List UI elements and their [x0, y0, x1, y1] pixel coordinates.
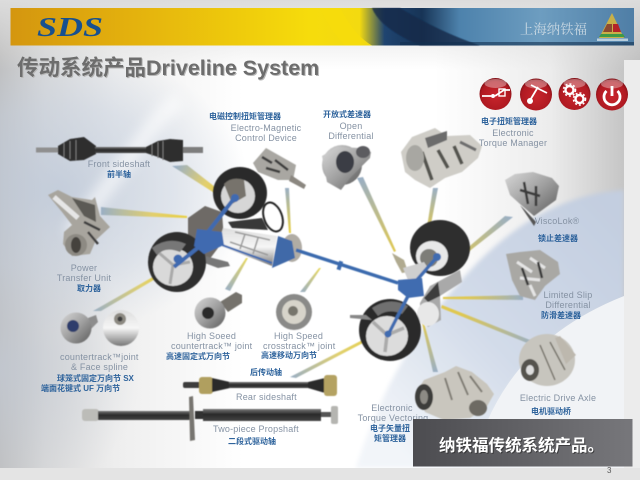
button: gears — [558, 78, 590, 110]
label: electronic torque manager — [479, 116, 547, 148]
front lower wheel — [148, 232, 206, 292]
label: front sideshaft: Front sideshaft — [88, 159, 151, 169]
two-piece propshaft — [82, 396, 338, 441]
front axle arm — [202, 256, 230, 268]
limited slip differential — [506, 250, 560, 300]
open differential — [322, 145, 371, 190]
label: high speed crosstrack: 高速移动万向节 — [261, 350, 317, 360]
title: 传动系统产品Driveline System — [17, 55, 319, 80]
label: torque vectoring: 电子矢量扭 — [370, 423, 410, 433]
label: power transfer unit: Power — [71, 263, 97, 273]
label: open differential: 开放式差速器 — [323, 109, 371, 119]
label: rear sideshaft: Rear sideshaft — [236, 392, 297, 402]
label: viscolok: ViscoLok® — [535, 216, 580, 226]
header banner — [10, 8, 634, 46]
label: torque vectoring — [358, 403, 428, 443]
label: high speed crosstrack: High Speed — [274, 331, 323, 341]
label: high speed countertrack — [166, 331, 253, 361]
label: limited slip: Limited Slip — [544, 290, 592, 300]
logo: SDS: SDS — [37, 12, 103, 42]
blue front driveshafts — [174, 194, 272, 267]
viscolok differential — [505, 172, 559, 226]
label: open differential: Open — [340, 121, 362, 131]
label: high speed crosstrack — [261, 331, 336, 360]
label: countertrack and face spline: 球笼式固定万向节 SX — [57, 373, 135, 383]
engine — [188, 206, 224, 264]
label: electric drive axle: Electric Drive Axle — [520, 393, 596, 403]
label: high speed countertrack: 高速固定式万向节 — [166, 351, 230, 361]
label: high speed countertrack: High Soeed — [187, 331, 236, 341]
caption box: 纳铁福传统系统产品。 — [439, 435, 604, 455]
brand name: 上海纳铁福 — [520, 19, 587, 38]
caption box: 纳铁福传统系统产品。 — [440, 436, 605, 456]
label: limited slip: Differential — [545, 300, 591, 310]
button: shaft — [520, 78, 552, 110]
label: two-piece propshaft — [213, 424, 299, 446]
label: electro-magnetic — [209, 111, 302, 143]
label: power transfer unit: 取力器 — [77, 283, 101, 293]
high speed countertrack joint — [194, 292, 242, 328]
front sideshaft — [36, 137, 203, 162]
caption box — [413, 419, 632, 466]
label: power transfer unit: Transfer Unit — [57, 273, 111, 283]
label: two-piece propshaft: 二段式驱动轴 — [228, 436, 276, 446]
label: countertrack and face spline: countertrack™joint — [60, 352, 139, 362]
label: electro-magnetic: Control Device — [235, 133, 297, 143]
label: torque vectoring: Torque Vectoring — [358, 413, 428, 423]
countertrack joint and face spline — [60, 310, 139, 346]
electro-magnetic control device — [253, 148, 306, 189]
label: electronic torque manager: Torque Manager — [479, 138, 547, 148]
rear lower wheel — [350, 299, 421, 361]
label: countertrack and face spline — [41, 352, 139, 393]
label: rear sideshaft — [236, 367, 297, 402]
propshaft — [296, 250, 398, 283]
transmission — [218, 228, 277, 266]
label: open differential: Differential — [328, 131, 374, 141]
page number: 3 — [607, 466, 612, 475]
blue rear differential — [384, 253, 441, 338]
rear suspension — [392, 253, 462, 327]
label: electric drive axle: 电机驱动桥 — [531, 406, 571, 416]
label: power transfer unit — [57, 263, 111, 293]
electronic torque manager — [401, 128, 482, 188]
label: front sideshaft: 前半轴 — [107, 169, 131, 179]
electric drive axle — [519, 334, 576, 386]
label: rear sideshaft: 后传动轴 — [250, 367, 282, 377]
electronic torque vectoring unit — [415, 366, 494, 420]
high speed crosstrack joint — [276, 294, 312, 330]
label: torque vectoring: 矩管理器 — [374, 433, 406, 443]
transfer case — [282, 234, 302, 262]
title: 传动系统产品Driveline System — [18, 56, 320, 81]
rear upper wheel — [410, 220, 470, 276]
label: viscolok — [535, 216, 580, 243]
vehicle driveline chassis — [148, 167, 470, 361]
button: power — [596, 78, 628, 110]
label: high speed countertrack: countertrack™ joint — [171, 341, 253, 351]
label: viscolok: 锁止差速器 — [538, 233, 578, 243]
logo: triangle — [597, 13, 628, 41]
label: electronic torque manager: 电子扭矩管理器 — [481, 116, 537, 126]
label: countertrack and face spline: 端面花键式 UF 万向节 — [41, 383, 120, 393]
steering wheel — [259, 200, 287, 234]
label: electro-magnetic: 电磁控制扭矩管理器 — [209, 111, 281, 121]
label: electric drive axle — [520, 393, 596, 416]
power transfer unit — [48, 190, 110, 256]
label: open differential — [323, 109, 374, 141]
label: limited slip: 防滑差速器 — [541, 310, 581, 320]
label: limited slip — [541, 290, 592, 320]
navigation buttons — [480, 78, 628, 110]
front upper wheel — [213, 167, 267, 219]
label: high speed crosstrack: crosstrack™ joint — [263, 341, 336, 351]
rear sideshaft — [183, 375, 337, 396]
label: electronic torque manager: Electronic — [492, 128, 534, 138]
label: electro-magnetic: Electro-Magnetic — [231, 123, 302, 133]
button: driveline — [480, 78, 512, 110]
label: two-piece propshaft: Two-piece Propshaft — [213, 424, 299, 434]
label: front sideshaft — [88, 159, 151, 179]
connector beams — [93, 165, 535, 378]
label: countertrack and face spline: & Face spline — [71, 362, 128, 372]
label: torque vectoring: Electronic — [371, 403, 413, 413]
